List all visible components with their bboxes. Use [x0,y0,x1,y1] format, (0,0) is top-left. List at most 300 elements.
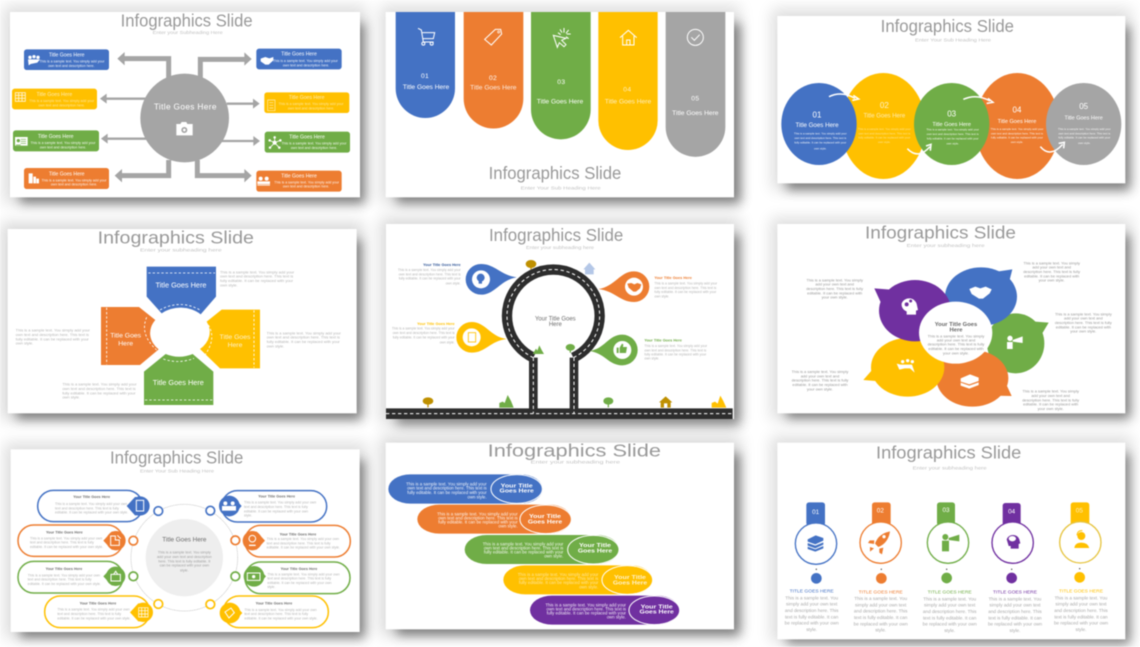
central circle: Title Goes Here [154,101,217,111]
item: blue left: text and description here. This text is fully [55,506,119,510]
pill: green: own style. [544,554,563,559]
icon: man with megaphone [1007,336,1023,349]
circle: gray 05: own style. [1078,141,1091,145]
title: Infographics Slide [488,441,661,461]
tab: gray 05 [666,12,725,157]
column: 05 yellow [1054,502,1108,632]
column: 01 blue: simply add your own text [786,602,838,607]
text: yellow pin: Your Title Goes Here [417,322,455,326]
circle: yellow 02: Title Goes Here [863,114,906,120]
text: blue pin: own text and description here. This text is [399,272,461,276]
title: Infographics Slide [876,443,1021,463]
box: orange right: This is a sample text. You simply add your [274,180,340,184]
item: blue right: text and description here. This text is fully [244,505,308,509]
panel: slide 4 cross arrangement [1,222,364,420]
text: orange description: your own style. [1038,406,1064,411]
circle: gray 05: fully editable. It can be replaced with your [1058,136,1110,140]
pill: green [465,535,619,564]
text: orange pin: Your Title Goes Here [654,276,692,280]
box: orange left [24,168,109,189]
column: 01 blue: text is fully editable. It can [785,614,839,619]
central circle [140,74,229,162]
pill: blue: fully editable. It can be replaced with your [407,490,487,495]
tab: blue 01 [396,12,455,118]
tab: gray 05: 05 [691,96,699,103]
text: green pin: own text and description here. This text is [644,348,707,352]
bubble: blue [945,267,1017,326]
central disk: here. This text is fully editable. It [158,559,210,563]
text: yellow description: add your own text and [801,373,839,378]
text: orange description: own style. [16,341,33,346]
box: green left: Title Goes Here [38,134,74,140]
column: 05 yellow: text is fully editable. It can [1054,614,1108,619]
central disk: can be replaced with your own [160,564,209,568]
box: blue right: Title Goes Here [281,51,317,57]
item: green left: text and description here. This text is fully [28,578,92,582]
item: yellow right: editable. It can be replaced with your own style. [244,616,318,620]
item: orange right: editable. It can be replaced with your own style. [267,546,340,550]
panel: slide 6 speech bubbles [771,218,1132,420]
text: orange description: own text and description here. This text is [16,332,89,337]
arrows [100,52,260,182]
text: orange pin: fully editable. It can be replaced with your [654,290,717,294]
central circle: your own style. [943,350,969,355]
column: 01 blue: be replaced with your own [785,621,839,626]
box: yellow left: This is a sample text. You simply add your [29,99,95,103]
column: 02 orange: and description here. This [854,609,908,614]
item: orange right [243,525,350,557]
tab: yellow 04: Title Goes Here [605,99,651,106]
box: green left: own text and description here. [40,145,86,149]
icon: head with gears [902,298,918,315]
box: blue right: own text and description here. [283,63,329,67]
pill: green: This is a sample text. You simply add your [483,541,564,546]
text: orange description: This is a sample text. You simply [1022,389,1079,394]
text: purple description: add your own text and [815,282,854,287]
dotted ring [131,504,238,611]
road [386,270,733,414]
box: blue right [256,49,342,69]
column: 03 green: text is fully editable. It can [923,615,977,620]
shape: orange [101,307,159,365]
central circle: add your own text and [937,337,975,342]
item: green left: Your Title Goes Here [46,567,82,571]
text: orange pin: own text and description here. This text is [654,286,717,290]
text: purple description: editable. It can be replaced with [807,290,862,295]
text: green description: This is a sample text. You simply [1055,311,1112,316]
tab: blue 01: Title Goes Here [403,84,449,91]
column: 05 yellow: TITLE GOES HERE [1059,588,1104,594]
text: blue pin: This is a sample text. You simply add your [398,268,462,272]
title: Infographics Slide [98,227,254,247]
box: yellow right: This is a sample text. You simply add your [279,102,344,106]
pill: orange [417,505,571,534]
pill: orange: own style. [498,524,518,529]
item: orange right: text and description here. This text is fully [267,541,331,545]
item: green right: This is a sample text. You simply add your own [267,572,340,576]
column: 05 yellow: style. [1076,627,1086,632]
column: 05 yellow: simply add your own text [1055,602,1107,607]
icon: handshake [969,287,992,299]
subheading: Enter your subheading here [913,466,987,472]
text: blue description: your own style. [1039,278,1065,283]
box: blue left: Title Goes Here [49,53,85,59]
circle: blue 01: own style. [814,146,827,150]
text: purple description: your own style. [822,295,848,300]
item: yellow right: text and description here. This text is fully [244,612,308,616]
text: yellow pin: This is a sample text. You simply add your [392,327,456,331]
pill: yellow: fully editable. It can be replaced with your [519,580,599,585]
circle: orange 04: own text and description here. This text is [991,131,1044,135]
text: green pin [644,338,708,361]
text: blue description: description here. This text is fully [1023,269,1080,274]
central circle: editable. It can be replaced with [928,346,984,351]
column: 04 purple: be replaced with your own [988,622,1042,627]
pill: purple: Your Title [641,604,673,610]
column: 05 yellow: This is a sample text. You [1055,595,1108,600]
text: green description: own style. [62,395,80,400]
text: blue description: own style. [220,282,238,287]
column: 02 orange: This is a sample text. You [854,596,907,601]
pill: blue: Goes Here [499,489,534,495]
item: orange right: Your Title Goes Here [280,532,316,536]
circle: gray 05: own text and description here. This text is [1058,131,1111,135]
bubble: green [987,313,1049,373]
pill: orange: own text and description here. This text is [438,515,518,520]
text: yellow pin [392,322,456,344]
pill: purple: fully editable. It can be replaced with your [547,610,627,615]
item: green left: editable. It can be replaced with your own style. [28,582,101,586]
column: 02 orange: style. [875,628,886,633]
text: yellow description: fully editable. It can be replaced with your [267,339,340,344]
circle: yellow 02 [841,73,926,179]
column: 02 orange: be replaced with your own [854,621,908,626]
column: 03 green: be replaced with your own [923,622,977,627]
title: Infographics Slide [881,16,1014,36]
shape: orange: Here [118,341,133,348]
tab: orange 02: Title Goes Here [470,85,517,92]
pill: blue: Your Title [501,483,533,489]
pin: blue [466,264,517,295]
text: blue description: This is a sample text. You simply [1023,260,1080,265]
icons: roadside trees and houses [423,260,726,408]
panel: slide 1 central hub with arrows [3,5,367,204]
text: blue description: fully editable. It can be replaced with your [220,278,294,283]
column: 04 purple [988,503,1042,633]
column: 04 purple: simply add your own text [989,603,1041,608]
item: orange left: This is a sample text. You simply add your own [30,536,102,540]
tab: yellow 04: 04 [623,86,631,93]
pill: blue: own text and description here. This text is [407,486,487,491]
box: orange left: This is a sample text. You simply add your [42,178,107,182]
box: yellow left: own text and description here. [38,103,85,107]
column: 02 orange: 02 [877,508,884,515]
column: 03 green: simply add your own text [924,603,976,608]
column: 03 green: and description here. This [923,609,977,614]
tab: green 03: Title Goes Here [537,99,583,106]
item: blue right: style. [244,514,252,518]
text: green pin: Your Title Goes Here [644,338,682,342]
subheading: Enter your Subheading Here [153,30,223,36]
text: orange pin: This is a sample text. You simply add your [654,282,718,286]
circle: yellow 02: own text and description here. This text is [858,131,911,135]
icon: people [897,359,915,373]
panel: slide 7 pills around circle [4,443,367,639]
central disk [146,519,223,596]
pin: yellow [456,322,507,353]
column: 04 purple: style. [1010,628,1020,633]
column: 01 blue: TITLE GOES HERE [790,589,834,595]
text: green description: fully editable. It can be replaced with your [62,390,136,395]
item: yellow left: editable. It can be replaced with your own style. [57,616,131,620]
text: green description: own text and description here. This text is [62,386,136,391]
circle: yellow 02: This is a sample text. You simply add your [858,127,911,131]
pin: green [589,335,638,365]
column: 03 green: This is a sample text. You [923,596,976,601]
connector rings [129,506,240,609]
text: green description: editable. It can be replaced with [1056,324,1111,329]
panel: slide 2 hanging tabs [380,5,741,204]
item: blue left [38,490,150,522]
item: blue right: This is a sample text. You simply add your own [244,501,316,505]
pill: blue: This is a sample text. You simply add your [406,481,487,486]
item: blue right [219,491,327,522]
text: yellow pin: fully editable. It can be replaced with your [393,335,456,339]
item: green right: editable. It can be replaced with your own [267,581,332,585]
box: orange right [256,171,342,192]
item: blue right: editable. It can be replaced with your own [244,509,308,513]
circle: blue 01: fully editable. It can be replaced with your [794,140,846,144]
title: Infographics Slide [865,223,1016,243]
circle: green 03 [914,83,989,165]
title: Infographics Slide [489,225,623,245]
circle: green 03: fully editable. It can be replaced with your [927,136,979,140]
bubble: yellow [863,338,944,397]
pill: yellow: own style. [579,584,598,589]
tab: green 03: 03 [557,79,565,86]
item: orange left: text and description here. This text is fully [30,541,94,545]
shape: blue [147,267,216,314]
bubble: purple [874,280,951,341]
central disk: Title Goes Here [162,537,207,544]
central circle: This is a sample text. You simply [928,333,984,338]
circle: gray 05 [1046,83,1121,165]
item: green right [244,562,350,594]
column: 04 purple: 04 [1008,508,1016,515]
box: blue left: own text and description here. [48,64,95,68]
column: 03 green: style. [944,628,955,633]
pill: orange: Goes Here [528,519,562,525]
shape: yellow: Here [228,342,243,349]
tab: blue 01: 01 [421,73,429,80]
text: blue description: editable. It can be replaced with [1024,273,1079,278]
central disk: add your own text and description [157,555,212,559]
text: blue pin: Your Title Goes Here [423,263,461,267]
circle: orange 04: Title Goes Here [998,119,1036,125]
column: 01 blue: and description here. This [785,608,839,613]
text: green description: description here. This text is fully [1055,320,1112,325]
column: 03 green: TITLE GOES HERE [928,589,972,595]
column: 02 orange: text is fully editable. It can [854,615,908,620]
box: orange right: Title Goes Here [281,174,317,180]
circle: blue 01: own text and description here. This text is [794,136,847,140]
column: 02 orange: simply add your own text [855,602,907,607]
circle: blue 01 [781,83,857,165]
circle: gray 05: 05 [1079,102,1089,111]
text: yellow description: description here. This text is fully [792,378,848,383]
box: yellow left [12,89,97,109]
box: yellow right: Title Goes Here [289,95,325,101]
text: yellow description: own style. [267,343,284,348]
box: yellow right: own text and description here. [288,106,334,110]
item: orange left: Your Title Goes Here [46,531,83,535]
box: orange left: Title Goes Here [49,171,85,177]
circle: blue 01: This is a sample text. You simply add your [794,132,847,136]
pill: purple: own text and description here. This text is [546,606,626,611]
subheading: Enter your subheading here [140,247,222,253]
circle: yellow 02: own style. [878,140,891,144]
box: yellow left: Title Goes Here [36,92,72,98]
column: 03 green [923,502,977,633]
central circle: description here. This text is fully [928,342,984,347]
item: yellow left: text and description here. This text is fully [57,612,121,616]
subheading: Enter Your Sub Heading Here [140,469,214,475]
box: blue right: This is a sample text. You simply add your [273,59,339,63]
tab: orange 02: 02 [489,75,497,82]
title: Infographics Slide [489,163,621,183]
tab: orange 02 [464,12,523,128]
column: 04 purple: TITLE GOES HERE [993,589,1038,595]
box: orange left: own text and description here. [51,183,97,187]
box: green right: own text and description here. [291,146,337,150]
text: blue pin: own style. [446,281,461,285]
column: 01 blue: This is a sample text. You [785,595,838,600]
circle: blue 01: 01 [813,110,822,119]
box: green left: This is a sample text. You simply add your [31,141,96,145]
column: 02 orange: TITLE GOES HERE [859,589,903,595]
column: 05 yellow: and description here. This [1054,608,1108,613]
text: blue description: add your own text and [1032,265,1071,270]
shape: green: Title Goes Here [153,378,204,387]
pin: orange [598,271,649,302]
center label: Your Title Goes [535,316,576,322]
bubble: orange [936,350,1012,407]
central disk: style. [180,568,189,572]
column: 04 purple: This is a sample text. You [989,596,1042,601]
text: yellow pin: own text and description here. This text is [393,331,455,335]
text: yellow pin: own style. [440,340,455,344]
pill: orange: This is a sample text. You simply add your [437,511,518,516]
box: green right: Title Goes Here [289,135,325,141]
text: purple description: This is a sample text. You simply [806,277,863,282]
column: 04 purple: text is fully editable. It can [988,615,1042,620]
tab: green 03 [531,12,591,139]
circle: orange 04: This is a sample text. You simply add your [991,127,1043,131]
column: 01 blue [785,502,839,632]
circle: gray 05: This is a sample text. You simply add your [1058,127,1111,131]
text: green pin: fully editable. It can be replaced with your [644,352,707,356]
title: Infographics Slide [110,447,243,467]
text: yellow description: This is a sample text. You simply add your [267,330,342,335]
item: green right: text and description here. This text is fully [267,577,331,581]
pill: yellow: Your Title [614,575,646,581]
text: orange description: editable. It can be replaced with [1023,402,1078,407]
subheading: Enter Your Sub Heading Here [521,186,601,192]
column: 02 orange [854,502,908,633]
item: yellow left: Your Title Goes Here [80,601,116,605]
pill: green: Your Title [579,543,611,549]
circle: green 03: 03 [947,109,957,118]
box: green right: This is a sample text. You simply add your [282,142,347,146]
item: green right: style. [267,585,275,589]
pill: orange: Your Title [529,514,561,520]
shape: yellow: Title Goes [220,334,251,341]
text: green pin: own style. [644,357,659,361]
circle: blue 01: Title Goes Here [795,122,839,129]
subheading: Enter Your Sub Heading Here [915,37,991,43]
circle: orange 04: 04 [1013,105,1022,114]
item: yellow right: Your Title Goes Here [256,601,292,605]
item: blue left: editable. It can be replaced with your own style. [55,511,128,515]
pill: purple [530,596,680,625]
panel: slide 8 staggered pills [380,436,741,636]
item: yellow right: This is a sample text. You simply add your own [244,608,317,612]
text: orange description: fully editable. It can be replaced with your [16,336,89,341]
text: green description: your own style. [1070,329,1096,334]
text: blue pin: fully editable. It can be replaced with your [399,277,462,281]
shape: blue: Title Goes Here [155,281,207,290]
item: green left: This is a sample text. You simply add your own [28,573,100,577]
shape: orange: Title Goes [110,332,142,339]
text: orange pin [654,276,718,298]
text: orange description: add your own text and [1031,393,1070,398]
box: yellow right [264,92,349,113]
item: green left [18,561,125,593]
pill: yellow: This is a sample text. You simply add your [518,572,599,577]
text: yellow description: your own style. [807,386,833,391]
text: green description: add your own text and [1064,316,1103,321]
circle: yellow 02: fully editable. It can be replaced with your [858,136,910,140]
circle: green 03: own text and description here. This text is [927,132,979,136]
column: 05 yellow: 05 [1076,507,1083,514]
box: green left [13,130,99,151]
tab: yellow 04 [598,12,658,150]
box: blue left [24,49,109,70]
central disk: This is a sample text. You simply [158,551,211,555]
pill: blue: own style. [467,494,487,499]
title: Infographics Slide [121,11,253,31]
circle: orange 04: fully editable. It can be replaced with your [991,136,1043,140]
item: yellow left [45,596,153,628]
item: yellow left: This is a sample text. You simply add your own [57,608,130,612]
panel: slide 9 numbered circles [771,436,1132,644]
column: 05 yellow: be replaced with your own [1054,621,1108,626]
tab: gray 05: Title Goes Here [672,110,719,117]
text: orange description: description here. This text is fully [1022,397,1079,402]
text: yellow description: editable. It can be replaced with [792,382,848,387]
subheading: Enter your subheading here [907,243,985,249]
text: purple description: description here. This text is fully [806,286,863,291]
text: green pin: This is a sample text. You simply add your [644,344,708,348]
circle: yellow 02: 02 [880,101,889,110]
shape: yellow [200,310,260,368]
text: orange pin: own style. [654,294,669,298]
text: blue description: own text and description here. This text is [220,274,293,279]
subheading: Enter your subheading here [531,459,620,465]
pill: orange: fully editable. It can be replaced with your [438,519,518,524]
text: yellow description: This is a sample text. You simply [792,369,848,374]
text: yellow description: own text and description here. This text is [267,335,340,340]
